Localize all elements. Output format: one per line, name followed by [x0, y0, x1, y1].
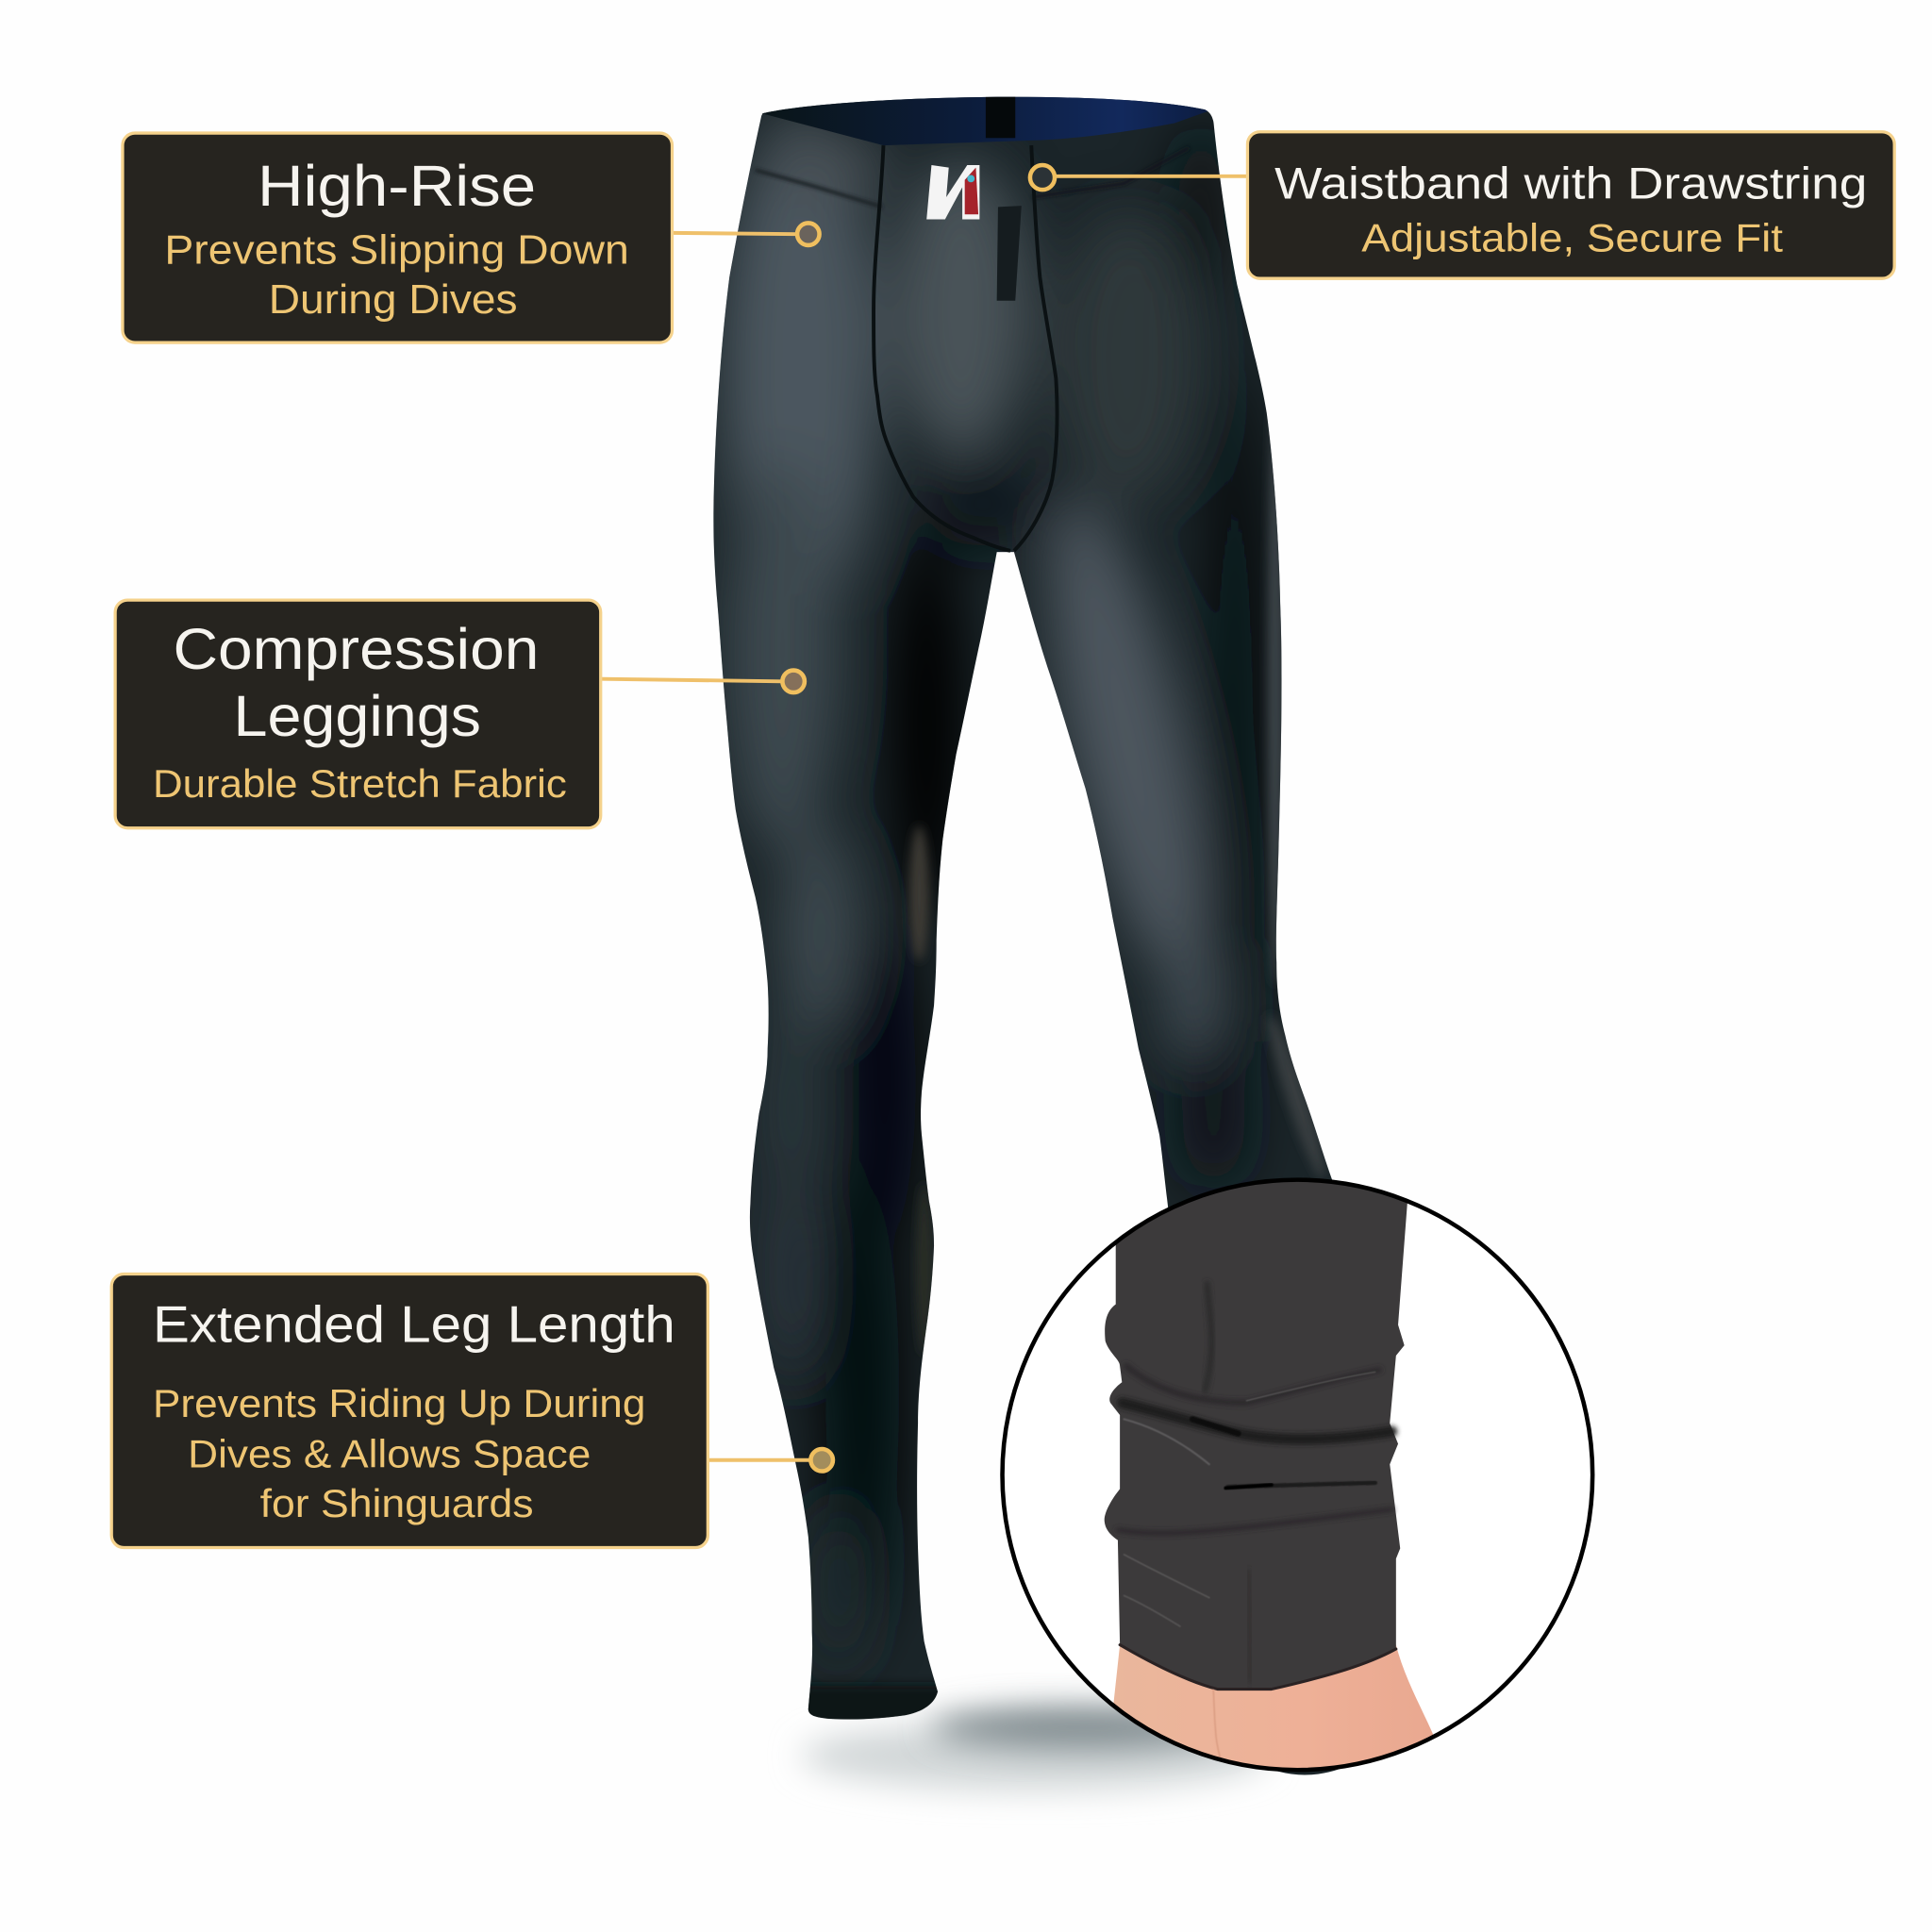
cuff fabric	[1105, 1160, 1410, 1690]
text: during dives: During Dives	[269, 277, 518, 323]
skin	[1113, 1645, 1434, 1768]
text: adjustable: Adjustable, Secure Fit	[1361, 215, 1783, 259]
card: compression	[115, 600, 601, 828]
marker: leg length	[810, 1449, 833, 1472]
connector: leg length	[708, 1458, 810, 1461]
connector: high-rise	[673, 233, 797, 234]
panel: high-rise	[123, 133, 820, 342]
marker: high-rise	[797, 223, 820, 245]
connector: waistband	[1056, 175, 1248, 177]
card: leg length	[111, 1274, 708, 1547]
panel: compression	[115, 600, 805, 828]
text: riding up: Prevents Riding Up During	[153, 1381, 645, 1425]
waistband seam right	[1033, 148, 1189, 197]
panel: waistband	[1030, 132, 1894, 278]
connector: compression	[601, 679, 782, 681]
text: shinguards: for Shinguards	[260, 1481, 534, 1525]
fly seam left	[874, 145, 1010, 551]
inset: cuff close-up	[1003, 1160, 1592, 1817]
fabric folds	[1118, 1284, 1396, 1772]
heading: compression: Compression	[174, 617, 539, 682]
heading: waistband: Waistband with Drawstring	[1274, 158, 1867, 208]
text: prevents slipping: Prevents Slipping Down	[164, 228, 629, 274]
text: dives space: Dives & Allows Space	[188, 1432, 591, 1476]
fly seam right	[1014, 145, 1058, 551]
card: waistband	[1247, 132, 1894, 278]
logo	[926, 165, 979, 219]
marker: waistband	[1030, 165, 1055, 190]
heading: high-rise: High-Rise	[258, 154, 536, 219]
drawstring	[997, 206, 1022, 301]
inner back seam	[986, 93, 1015, 138]
leggings illustration	[690, 74, 1380, 1799]
card: high-rise	[123, 133, 672, 342]
heading: leggings: Leggings	[234, 684, 481, 749]
waistband opening	[761, 95, 1212, 145]
ground shadow	[801, 1707, 1269, 1790]
waistband seam left	[756, 170, 882, 207]
marker: compression	[782, 671, 805, 692]
inset ring	[1003, 1180, 1592, 1770]
panel: leg length	[111, 1274, 833, 1547]
heading: leg length: Extended Leg Length	[153, 1294, 675, 1353]
text: durable: Durable Stretch Fabric	[153, 761, 567, 806]
